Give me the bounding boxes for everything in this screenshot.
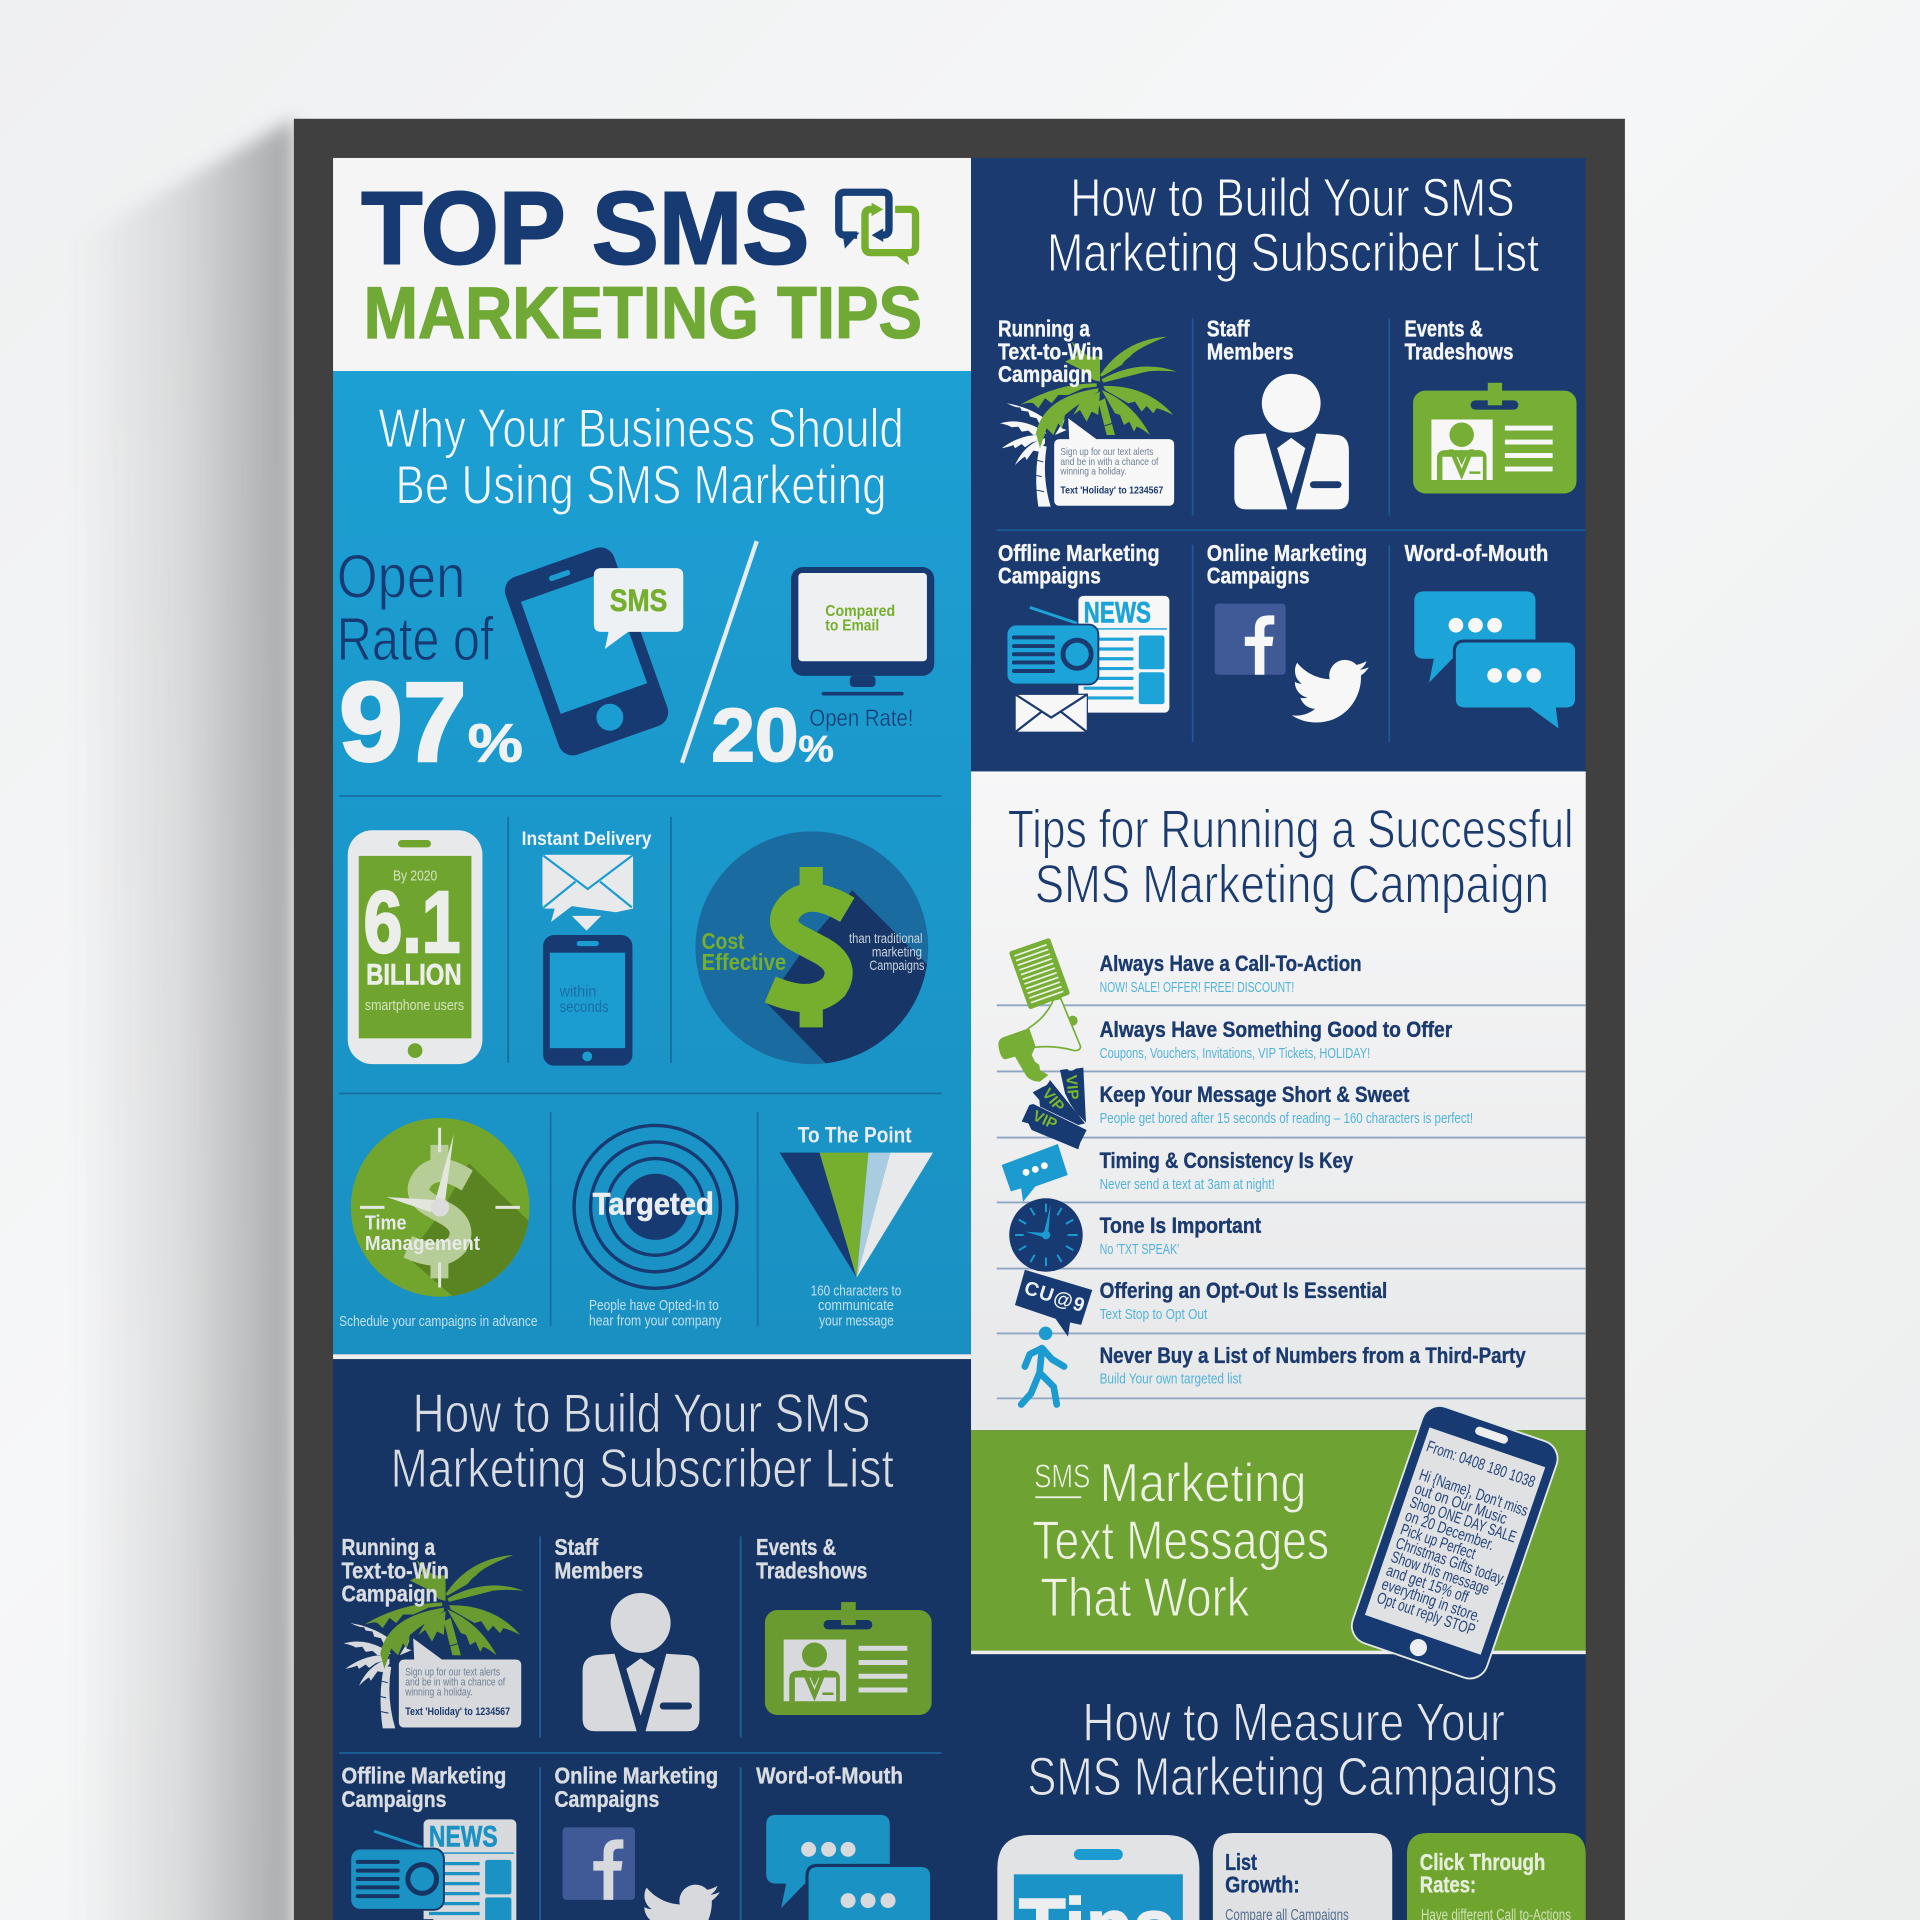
item: online marketing: Online Marketing bbox=[554, 1763, 718, 1789]
tip 5 bbox=[1100, 1213, 1262, 1258]
heading: sms marketing text messages: That Work bbox=[1040, 1566, 1250, 1628]
icon: vip tickets: VIP bbox=[1038, 1085, 1067, 1115]
icon: tilted phone with message: out on Our Music bbox=[1412, 1480, 1509, 1528]
icon: tilted phone with message: on 20 December. bbox=[1403, 1507, 1497, 1554]
item: online marketing: Campaigns bbox=[554, 1786, 659, 1812]
card: smartphone users: By 2020 bbox=[393, 868, 437, 884]
stat: open rate 97 percent: % bbox=[468, 714, 523, 774]
tip 1 bbox=[1100, 951, 1362, 996]
tip 2 bbox=[1100, 1017, 1453, 1062]
card: instant delivery: Instant Delivery bbox=[522, 828, 652, 850]
icon: vip tickets: VIP bbox=[1030, 1108, 1060, 1133]
stat: open rate 97 percent: Open bbox=[337, 543, 465, 611]
tip 2: Always Have Something Good to Offer bbox=[1100, 1017, 1453, 1042]
icon: tilted phone with sms bubble: SMS bbox=[610, 582, 667, 618]
stat: 20 percent open rate: 20 bbox=[711, 693, 798, 777]
card: instant delivery: within bbox=[559, 984, 596, 1001]
panel: build subscriber list (left copy) bbox=[333, 1359, 971, 1920]
icon: chat arrows bbox=[839, 192, 916, 265]
item: events and tradeshows: Tradeshows bbox=[1404, 339, 1513, 365]
card: instant delivery bbox=[522, 828, 652, 1066]
slash divider bbox=[682, 541, 757, 763]
card: targeted: People have Opted-In to bbox=[589, 1298, 719, 1314]
item: word of mouth bbox=[756, 1763, 932, 1920]
icon: walking person bbox=[1021, 1327, 1064, 1404]
heading: why your business bbox=[379, 408, 900, 514]
icon: tilted phone with message: Show this message bbox=[1389, 1548, 1492, 1598]
item: text-to-win: Text 'Holiday' to 1234567 bbox=[405, 1706, 510, 1718]
heading: sms marketing text messages: Marketing bbox=[1100, 1452, 1307, 1514]
stat: 20 percent open rate: % bbox=[798, 729, 834, 770]
panel: text messages that work bbox=[971, 1430, 1586, 1654]
icon: tilted phone with message: and get 15% off bbox=[1384, 1562, 1471, 1607]
heading: how to build bbox=[394, 1393, 894, 1498]
card: cost effective: Campaigns bbox=[869, 957, 924, 973]
card: to the point: communicate bbox=[818, 1298, 894, 1314]
card: instant delivery: seconds bbox=[560, 999, 609, 1016]
tip 4: Timing & Consistency Is Key bbox=[1100, 1148, 1354, 1173]
icon: cu@9 speech bubble: CU@9 bbox=[1021, 1277, 1088, 1317]
tip 3: Keep Your Message Short & Sweet bbox=[1100, 1082, 1410, 1107]
panel: why sms marketing bbox=[333, 371, 971, 1354]
heading: how to build: How to Build Your SMS bbox=[1070, 168, 1515, 228]
item: text-to-win: Campaign bbox=[342, 1580, 438, 1606]
heading: how to measure: How to Measure Your bbox=[1082, 1693, 1505, 1753]
item: online marketing bbox=[554, 1763, 720, 1920]
icon: vip tickets bbox=[1022, 1068, 1087, 1149]
card: smartphone users: BILLION bbox=[366, 958, 462, 991]
item: offline marketing: Offline Marketing bbox=[998, 540, 1160, 566]
item: events and tradeshows: Events & bbox=[756, 1534, 836, 1560]
heading: tips for running: SMS Marketing Campaign bbox=[1035, 854, 1549, 914]
panel: measure campaigns bbox=[971, 1654, 1586, 1920]
card: to the point: your message bbox=[819, 1313, 894, 1329]
icon: tilted phone with message: Christmas Gifts today. bbox=[1393, 1534, 1508, 1589]
panel: title bbox=[333, 158, 971, 371]
item: events and tradeshows: Tradeshows bbox=[756, 1557, 867, 1583]
tip 5: No 'TXT SPEAK' bbox=[1100, 1242, 1179, 1258]
tip 7: Never Buy a List of Numbers from a Third-Party bbox=[1100, 1343, 1526, 1368]
heading: tips for running bbox=[1008, 799, 1573, 914]
item: online marketing: Online Marketing bbox=[1207, 540, 1367, 566]
tip 5: Tone Is Important bbox=[1100, 1213, 1262, 1238]
item: staff members bbox=[1207, 316, 1349, 509]
stat: open rate 97 percent: Rate of bbox=[337, 605, 494, 673]
heading: how to build: How to Build Your SMS bbox=[413, 1382, 871, 1444]
item: offline marketing: NEWS bbox=[429, 1820, 498, 1853]
item: text-to-win bbox=[342, 1534, 524, 1728]
heading: why your business: Why Your Business Should bbox=[378, 397, 904, 459]
heading: top sms: TOP SMS bbox=[361, 170, 809, 285]
card: cost effective bbox=[696, 831, 928, 1064]
item: offline marketing bbox=[998, 540, 1169, 732]
card: targeted bbox=[574, 1125, 737, 1329]
card: cost effective: Effective bbox=[702, 949, 786, 975]
card: click through rates bbox=[1407, 1833, 1586, 1920]
tip 3 bbox=[1100, 1082, 1473, 1127]
heading: sms marketing text messages: SMS bbox=[1034, 1458, 1090, 1495]
item: text-to-win: Text-to-Win bbox=[342, 1557, 449, 1583]
card: smartphone users bbox=[348, 830, 482, 1064]
item: offline marketing: Campaigns bbox=[998, 563, 1101, 589]
item: staff members: Members bbox=[554, 1557, 643, 1583]
icon: tilted phone with message: everything in store. bbox=[1379, 1575, 1483, 1626]
icon: tilted phone with message: Opt out reply STOP bbox=[1375, 1589, 1478, 1639]
heading: tips for running: Tips for Running a Successful bbox=[1008, 799, 1573, 859]
item: word of mouth: Word-of-Mouth bbox=[756, 1763, 903, 1789]
item: staff members: Staff bbox=[554, 1534, 598, 1560]
item: events and tradeshows: Events & bbox=[1404, 316, 1483, 342]
card: targeted: hear from your company bbox=[589, 1313, 722, 1329]
icon: monitor compared to email: Compared bbox=[825, 603, 895, 620]
icon: monitor compared to email: to Email bbox=[825, 618, 879, 635]
tip 4: Never send a text at 3am at night! bbox=[1100, 1177, 1275, 1193]
card: targeted: Targeted bbox=[593, 1186, 714, 1222]
icon: tilted phone with message bbox=[1347, 1401, 1563, 1683]
card: list growth: List bbox=[1225, 1849, 1257, 1875]
card: list growth bbox=[1213, 1833, 1392, 1920]
heading: sms marketing text messages: Text Messages bbox=[1032, 1509, 1329, 1571]
card: cost effective: Cost bbox=[702, 928, 745, 954]
item: word of mouth bbox=[1404, 540, 1577, 732]
card: time management: Time bbox=[365, 1212, 407, 1234]
item: offline marketing bbox=[342, 1763, 516, 1920]
item: offline marketing: Offline Marketing bbox=[342, 1763, 506, 1789]
heading: how to measure bbox=[1027, 1693, 1558, 1807]
item: events and tradeshows bbox=[756, 1534, 932, 1715]
item: text-to-win bbox=[998, 316, 1177, 507]
card: click through rates: Rates: bbox=[1420, 1872, 1476, 1898]
item: text-to-win: and be in with a chance of bbox=[405, 1677, 505, 1689]
icon: tilted phone with message: Shop ONE DAY SALE bbox=[1407, 1493, 1519, 1547]
heading: how to build: Marketing Subscriber List bbox=[1047, 223, 1539, 283]
tip 6 bbox=[1100, 1278, 1387, 1323]
heading: why your business: Be Using SMS Marketing bbox=[396, 453, 887, 515]
icon: tilted phone with message: From: 0408 180 1038 bbox=[1424, 1437, 1538, 1491]
item: word of mouth: Word-of-Mouth bbox=[1404, 540, 1548, 566]
icon: tilted phone with message: Pick up Perfect bbox=[1398, 1521, 1478, 1563]
item: text-to-win: and be in with a chance of bbox=[1060, 457, 1158, 468]
heading: how to build bbox=[1051, 178, 1538, 282]
stat: 20 percent open rate: Open Rate! bbox=[809, 705, 913, 732]
icon: tilted phone with sms bubble bbox=[501, 543, 683, 760]
card: cost effective: than traditional bbox=[849, 930, 923, 946]
card: smartphone users: 6.1 bbox=[364, 874, 460, 971]
item: text-to-win: Running a bbox=[998, 316, 1090, 342]
card: tips phone bbox=[997, 1835, 1199, 1920]
item: text-to-win: Text-to-Win bbox=[998, 339, 1103, 365]
item: text-to-win: winning a holiday. bbox=[404, 1687, 473, 1699]
card: time management: Schedule your campaigns in advance bbox=[339, 1314, 538, 1330]
card: list growth: Growth: bbox=[1225, 1872, 1300, 1898]
icon: clock bbox=[1009, 1198, 1083, 1272]
subscriber grid bbox=[342, 1534, 932, 1920]
tip 7: Build Your own targeted list bbox=[1100, 1372, 1242, 1388]
icon: chat bubble bbox=[1002, 1144, 1068, 1202]
poster frame bbox=[294, 119, 1625, 1920]
item: staff members: Members bbox=[1207, 339, 1294, 365]
item: staff members bbox=[554, 1534, 699, 1731]
tip 3: People get bored after 15 seconds of reading – 160 characters is perfect! bbox=[1100, 1111, 1473, 1127]
tip 2: Coupons, Vouchers, Invitations, VIP Tickets, HOLIDAY! bbox=[1100, 1046, 1370, 1062]
tip 6: Text Stop to Opt Out bbox=[1100, 1307, 1207, 1323]
item: text-to-win: winning a holiday. bbox=[1060, 467, 1127, 478]
card: time management bbox=[339, 1118, 539, 1330]
heading: how to build: Marketing Subscriber List bbox=[391, 1437, 894, 1499]
card: cost effective: marketing bbox=[872, 943, 922, 959]
card: to the point: To The Point bbox=[798, 1122, 912, 1147]
item: text-to-win: Sign up for our text alerts bbox=[405, 1667, 500, 1679]
icon: vip tickets: VIP bbox=[1062, 1074, 1081, 1100]
icon: megaphone bbox=[998, 941, 1081, 1082]
stat: open rate 97 percent: 97 bbox=[339, 658, 467, 784]
icon: cu@9 speech bubble bbox=[1015, 1270, 1092, 1337]
stat: 20 percent open rate bbox=[713, 707, 912, 762]
poster scene bbox=[100, 114, 1625, 1920]
card: time management: Management bbox=[365, 1233, 480, 1255]
item: online marketing: Campaigns bbox=[1207, 563, 1310, 589]
item: text-to-win: Sign up for our text alerts bbox=[1060, 447, 1153, 458]
stat: open rate 97 percent bbox=[340, 555, 522, 763]
heading: how to measure: SMS Marketing Campaigns bbox=[1027, 1747, 1558, 1807]
card: smartphone users: smartphone users bbox=[365, 998, 464, 1014]
divider band bbox=[333, 1354, 971, 1359]
tip 1: NOW! SALE! OFFER! FREE! DISCOUNT! bbox=[1100, 980, 1294, 996]
tip 4 bbox=[1100, 1148, 1354, 1193]
card: to the point: 160 characters to bbox=[811, 1284, 901, 1300]
heading: sms marketing text messages bbox=[1032, 1452, 1329, 1628]
tip 7 bbox=[1100, 1343, 1526, 1388]
item: offline marketing: NEWS bbox=[1084, 596, 1151, 629]
poster drop shadow bbox=[105, 115, 297, 1920]
icon: monitor compared to email bbox=[791, 567, 934, 696]
item: text-to-win: Running a bbox=[342, 1534, 435, 1560]
item: events and tradeshows bbox=[1404, 316, 1577, 493]
item: offline marketing: Campaigns bbox=[342, 1786, 446, 1812]
tip 6: Offering an Opt-Out Is Essential bbox=[1100, 1278, 1387, 1303]
icon: pale dollar sign bbox=[408, 1145, 467, 1278]
tip 1: Always Have a Call-To-Action bbox=[1100, 951, 1362, 976]
icon: dollar sign bbox=[770, 867, 847, 1027]
icon: tilted phone with message: Hi {Name}, Don't miss bbox=[1417, 1466, 1530, 1520]
item: online marketing bbox=[1207, 540, 1369, 722]
heading: marketing tips: MARKETING TIPS bbox=[364, 271, 922, 354]
card: to the point bbox=[780, 1122, 933, 1329]
item: staff members: Staff bbox=[1207, 316, 1250, 342]
item: text-to-win: Campaign bbox=[998, 361, 1092, 387]
panel: campaign tips bbox=[971, 771, 1586, 1430]
panel: build subscriber list (right) bbox=[971, 158, 1586, 771]
card: click through rates: Click Through bbox=[1420, 1849, 1545, 1875]
item: text-to-win: Text 'Holiday' to 1234567 bbox=[1060, 485, 1163, 496]
